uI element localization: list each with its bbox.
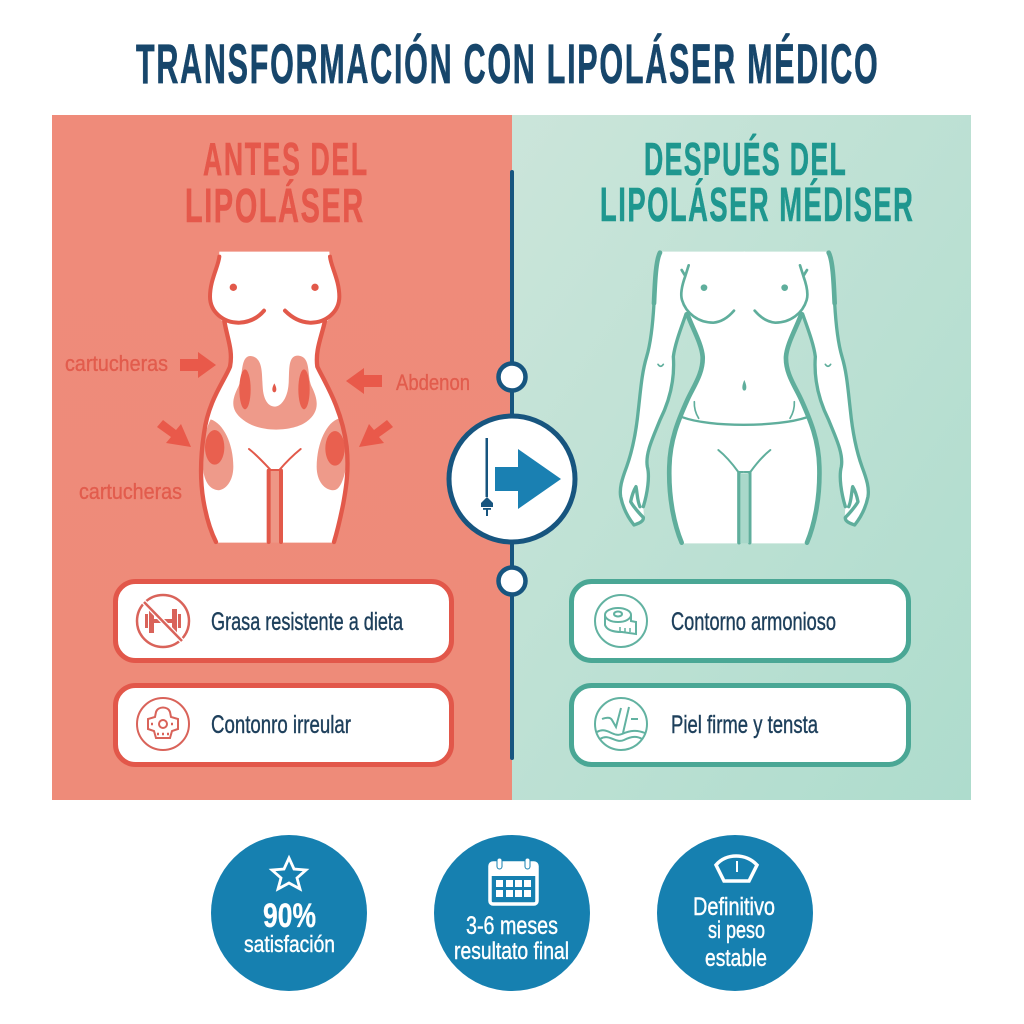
heading: after bbox=[600, 133, 913, 232]
stat: satisfaction bbox=[211, 835, 367, 991]
card: grasa resistente: Grasa resistente a dieta bbox=[211, 608, 403, 636]
stat: permanent result: estable bbox=[705, 945, 767, 972]
arrow: lower left bbox=[157, 420, 191, 447]
center divider with arrow bbox=[449, 172, 575, 758]
card: contorno armonioso bbox=[572, 582, 908, 660]
arrow: lower right bbox=[359, 420, 393, 447]
stat: time to final result: resultato final bbox=[454, 938, 569, 965]
arrow: upper left bbox=[180, 352, 216, 378]
stat: permanent result bbox=[657, 835, 813, 991]
icon: irregular contour bbox=[137, 698, 189, 750]
stat: permanent result: si peso bbox=[708, 917, 765, 944]
stat: time to final result: 3-6 meses bbox=[466, 912, 558, 940]
body after treatment bbox=[620, 252, 868, 543]
label: cartucheras lower: cartucheras bbox=[79, 479, 182, 504]
stat: time to final result bbox=[434, 835, 590, 991]
heading: before: LIPOLÁSER bbox=[185, 180, 363, 233]
title: TRANSFORMACIÓN CON LIPOLÁSER MÉDICO bbox=[136, 32, 878, 95]
card: contorno armonioso: Contorno armonioso bbox=[671, 608, 836, 636]
panel: after bbox=[512, 115, 971, 800]
arrow: upper right bbox=[346, 368, 382, 394]
arrow: transformation bbox=[495, 449, 561, 509]
icon: no dumbbell bbox=[137, 595, 189, 647]
stat: satisfaction: 90% bbox=[263, 897, 316, 935]
icon: laser probe bbox=[481, 438, 493, 516]
heading: after: LIPOLÁSER MÉDISER bbox=[600, 178, 913, 232]
card: piel firme: Piel firme y tensta bbox=[671, 711, 818, 739]
panel: before bbox=[52, 115, 512, 800]
heading: after: DESPUÉS DEL bbox=[644, 133, 846, 185]
body before treatment bbox=[201, 252, 348, 543]
card: contorno irregular: Contonro irreular bbox=[211, 711, 351, 739]
card: grasa resistente bbox=[116, 582, 452, 660]
icon: measuring tape bbox=[595, 595, 647, 647]
icon: scale bbox=[716, 856, 757, 881]
card: piel firme bbox=[572, 686, 908, 764]
icon: firm skin bbox=[595, 698, 647, 750]
heading: before: ANTES DEL bbox=[203, 133, 367, 185]
stat: satisfaction: satisfación bbox=[244, 931, 335, 957]
icon: star bbox=[272, 858, 306, 889]
card: contorno irregular bbox=[116, 686, 452, 764]
icon: calendar bbox=[490, 858, 537, 904]
label: abdomen: Abdenon bbox=[396, 370, 470, 395]
heading: before bbox=[185, 133, 367, 233]
label: cartucheras upper: cartucheras bbox=[65, 351, 168, 376]
stat: permanent result: Definitivo bbox=[693, 893, 775, 921]
